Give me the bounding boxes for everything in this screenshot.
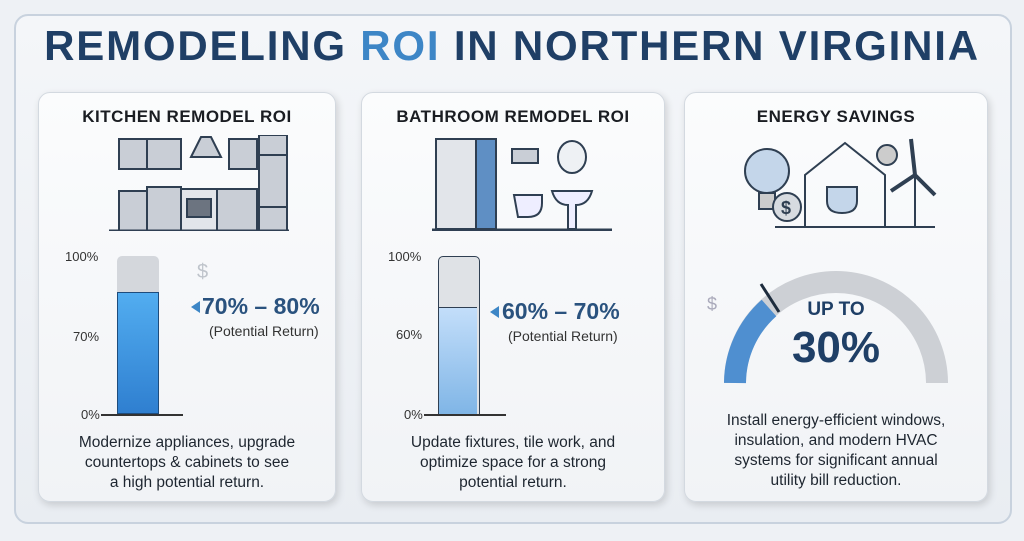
chart: kitchen bar: 100% <box>65 249 98 264</box>
panel: kitchen <box>38 92 336 502</box>
heading: bathroom: BATHROOM REMODEL ROI <box>396 107 630 126</box>
text: kitchen description: Modernize appliances, upgrade <box>79 434 295 451</box>
chart: kitchen bar: (Potential Return) <box>209 323 319 339</box>
heading: energy: ENERGY SAVINGS <box>757 107 915 126</box>
chart: bathroom bar: 60% – 70% <box>502 298 620 324</box>
icon: kitchen <box>109 135 289 231</box>
text: bathroom description: Update fixtures, tile work, and <box>411 434 615 451</box>
text: bathroom description: optimize space for a strong <box>420 454 606 471</box>
text: kitchen description: a high potential return. <box>110 474 264 491</box>
text: bathroom description: potential return. <box>459 474 567 491</box>
text: up to 30%: 30% <box>792 323 880 372</box>
chart: kitchen bar: $ <box>197 261 208 283</box>
title: REMODELING ROI IN NORTHERN VIRGINIA <box>44 22 980 69</box>
chart: bathroom bar: 100% <box>388 249 421 264</box>
icon: energy: $ <box>781 198 791 218</box>
text: energy description: utility bill reduction. <box>771 472 901 489</box>
text: kitchen description <box>79 434 295 491</box>
chart: gauge: $ <box>707 294 717 314</box>
text: energy description: insulation, and modern HVAC <box>734 432 938 449</box>
text: energy description: Install energy-efficient windows, <box>727 412 945 429</box>
chart: kitchen bar: 70% – 80% <box>202 293 320 319</box>
panel: energy <box>684 92 988 502</box>
chart: gauge <box>707 271 948 384</box>
chart: bathroom bar <box>388 249 620 422</box>
panel: bathroom <box>361 92 665 502</box>
text: up to 30% <box>792 299 880 372</box>
chart: kitchen bar: 0% <box>81 407 100 422</box>
chart: bathroom bar: (Potential Return) <box>508 328 618 344</box>
heading: kitchen: KITCHEN REMODEL ROI <box>82 107 292 126</box>
text: kitchen description: countertops & cabinets to see <box>85 454 289 471</box>
text: up to 30%: UP TO <box>807 299 865 320</box>
text: energy description <box>727 412 945 489</box>
chart: kitchen bar <box>65 249 320 422</box>
text: bathroom description <box>411 434 615 491</box>
text: energy description: systems for significant annual <box>734 452 938 469</box>
chart: bathroom bar: 60% <box>396 327 422 342</box>
chart: bathroom bar: 0% <box>404 407 423 422</box>
icon: energy <box>744 138 936 228</box>
icon: bathroom <box>432 138 612 231</box>
chart: kitchen bar: 70% <box>73 329 99 344</box>
